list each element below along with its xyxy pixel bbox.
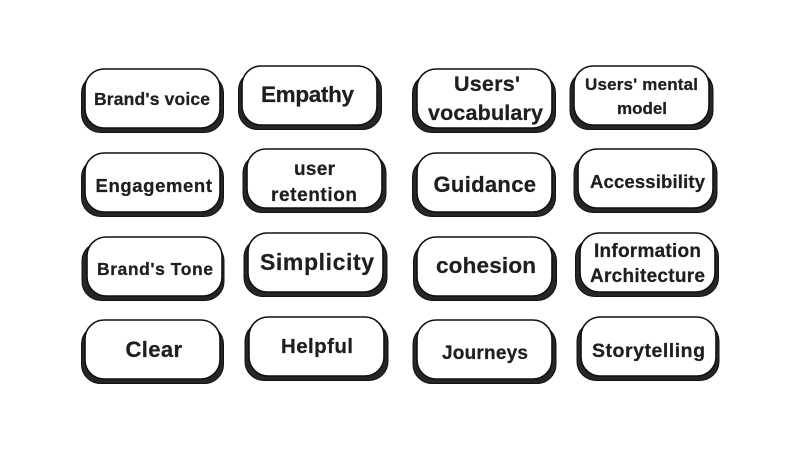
tag: Simplicity: [244, 233, 387, 296]
tag: Storytelling: Storytelling: [592, 340, 705, 362]
tag: Guidance: Guidance: [434, 172, 536, 197]
tag: Users' mental model: [570, 66, 713, 130]
tag: Helpful: [245, 317, 388, 380]
tag: Brand's voice: [82, 69, 224, 132]
tag: Users' vocabulary: Users': [454, 72, 520, 96]
tag: cohesion: cohesion: [436, 253, 536, 278]
tag: Clear: Clear: [126, 337, 182, 362]
tag: Engagement: Engagement: [96, 175, 212, 196]
tag: Accessibility: [574, 149, 717, 212]
tag: user retention: retention: [271, 185, 357, 206]
tag: user retention: [243, 149, 386, 212]
tag: Simplicity: Simplicity: [260, 249, 374, 275]
tag: Helpful: Helpful: [281, 335, 353, 358]
tag: Users' mental model: Users' mental: [585, 75, 698, 94]
tag: Accessibility: Accessibility: [590, 171, 706, 192]
tag: Information Architecture: Architecture: [590, 266, 705, 287]
tag: Storytelling: [577, 317, 719, 380]
tag: Information Architecture: Information: [594, 241, 701, 262]
tag: Brand's Tone: [82, 237, 224, 300]
tag: cohesion: [414, 237, 556, 300]
tag: Engagement: [82, 153, 224, 216]
tag: Information Architecture: [576, 233, 718, 296]
tag: Journeys: Journeys: [442, 343, 528, 364]
tag: Guidance: [412, 153, 556, 216]
tag: Users' vocabulary: [412, 69, 556, 132]
tag: Users' vocabulary: vocabulary: [428, 101, 543, 125]
tag: Brand's Tone: Brand's Tone: [97, 259, 213, 279]
tag: Brand's voice: Brand's voice: [94, 89, 210, 109]
tag: Empathy: Empathy: [261, 82, 354, 107]
tag: Empathy: [238, 66, 382, 130]
tag: Users' mental model: model: [617, 99, 667, 118]
tag: Clear: [82, 320, 224, 384]
tag: user retention: user: [294, 159, 336, 180]
tag: Journeys: [413, 320, 556, 384]
